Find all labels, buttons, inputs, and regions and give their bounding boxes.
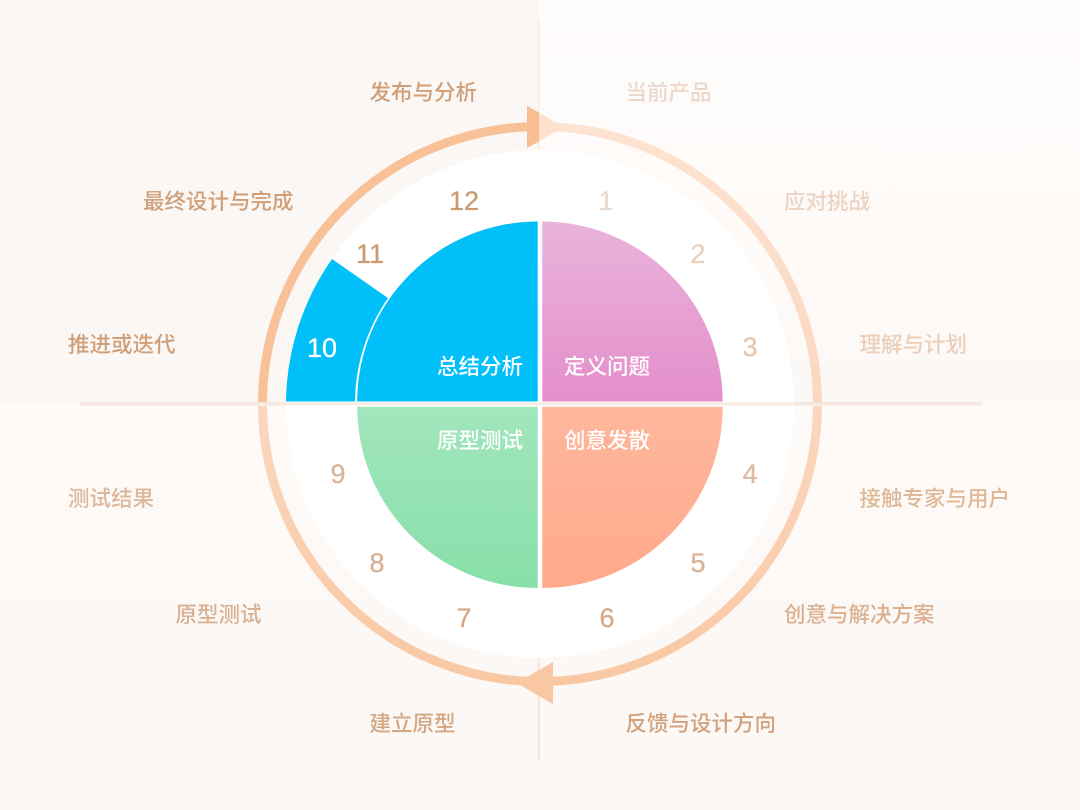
step numbers: 12 [449,186,479,216]
step labels: 最终设计与完成 [143,190,294,214]
step numbers: 9 [330,459,346,489]
step numbers [307,186,758,633]
step numbers: 7 [456,603,472,633]
step numbers: 3 [742,332,758,362]
quadrant: prototype test [357,407,538,588]
step labels: 理解与计划 [860,333,967,357]
cycle ring with arrows [262,106,818,704]
step labels: 测试结果 [68,487,154,511]
step labels: 发布与分析 [370,81,477,105]
ring: upper-right arc [540,126,818,402]
step numbers: 10 [307,333,337,363]
axis lines [80,20,983,760]
white inner disc [286,150,794,658]
step numbers: 2 [690,239,706,269]
step labels: 反馈与设计方向 [626,712,776,736]
step numbers: 1 [598,186,614,216]
arrow: top, light half [539,112,558,142]
step numbers: 8 [369,548,385,578]
step labels: 建立原型 [370,712,456,736]
step numbers: 5 [690,548,706,578]
step numbers: 11 [356,239,384,269]
quadrant: prototype test: 原型测试 [437,429,523,453]
step labels [68,81,1010,736]
step numbers: 4 [742,459,758,489]
step labels: 当前产品 [626,81,712,105]
ring: lower-left arc [262,406,540,682]
quadrant: summary analysis [357,222,538,402]
arrow: top, dark half [527,106,539,148]
axis over disc [286,402,794,406]
arrow: bottom [522,662,553,704]
step labels: 创意与解决方案 [784,603,935,627]
quadrant: summary analysis: 总结分析 [437,355,523,379]
ring: lower-right arc [540,406,818,682]
step numbers: 6 [599,603,615,633]
step labels: 应对挑战 [784,190,870,214]
quadrant: creative divergence [542,407,723,588]
ring: upper-left arc [262,126,539,402]
quadrant: define problem: 定义问题 [564,355,650,379]
step labels: 原型测试 [176,603,262,627]
step labels: 推进或迭代 [68,333,176,357]
segment 10 highlight [286,259,388,402]
step labels: 接触专家与用户 [860,487,1010,511]
quadrant: creative divergence: 创意发散 [564,429,650,453]
quadrant: define problem [542,222,723,402]
